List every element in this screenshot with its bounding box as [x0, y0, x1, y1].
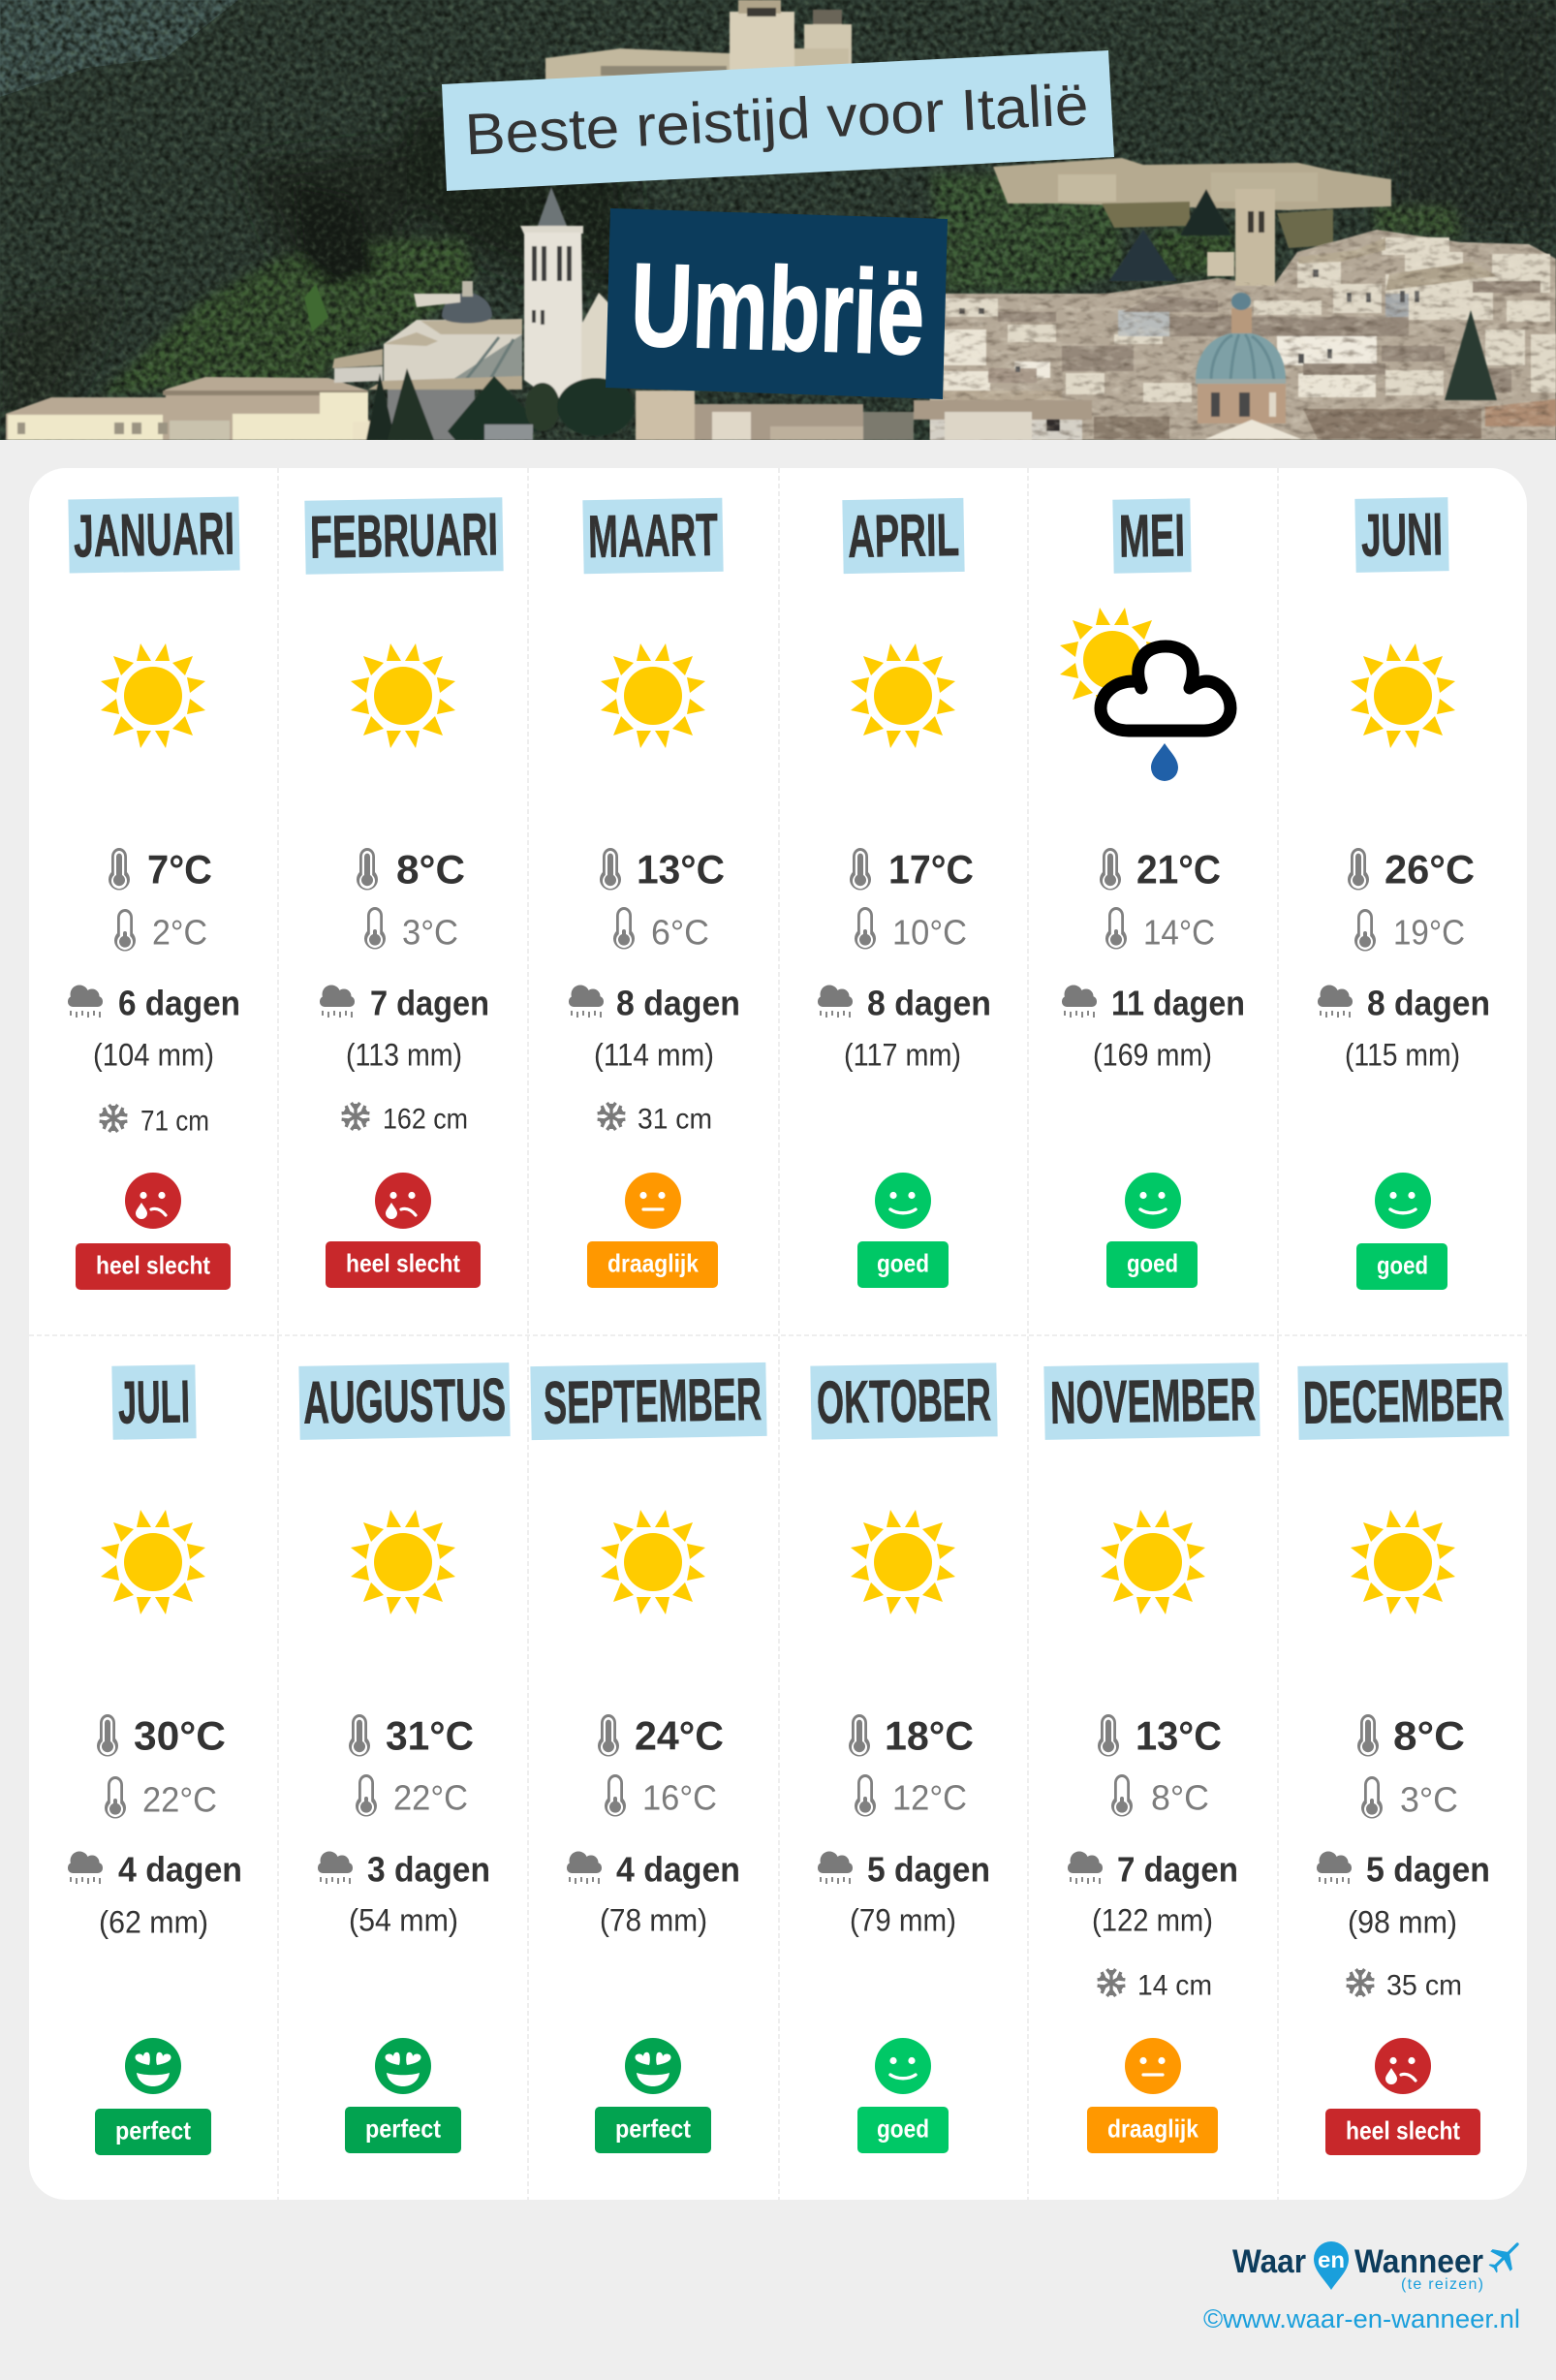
- icon: rating face: [1375, 1173, 1431, 1229]
- heading: november: [1043, 1362, 1260, 1440]
- icon: rain cloud: [569, 985, 604, 1018]
- rating label: heel slecht: [1346, 2116, 1460, 2145]
- heading: juni: [1354, 497, 1449, 573]
- rating label: [857, 1241, 949, 1288]
- rating label: goed: [1377, 1250, 1428, 1279]
- max temperature: 13°C: [1136, 1713, 1222, 1758]
- heading: januari: [68, 496, 240, 574]
- rainfall: (117 mm): [844, 1037, 961, 1072]
- icon: thermometer low: [855, 1774, 876, 1817]
- rating label: [595, 2107, 711, 2153]
- icon: sun: [101, 1510, 205, 1614]
- icon: snowflake: [100, 1105, 127, 1132]
- min temperature: 3°C: [402, 913, 458, 952]
- min temperature: 8°C: [1151, 1777, 1209, 1818]
- icon: rain cloud: [818, 985, 853, 1018]
- icon: thermometer high: [849, 1714, 870, 1757]
- rating label: heel slecht: [346, 1248, 460, 1277]
- icon: rain cloud: [68, 985, 103, 1018]
- rating label: [1356, 1243, 1447, 1290]
- snowfall: 31 cm: [638, 1103, 712, 1136]
- rainfall: (104 mm): [93, 1037, 214, 1072]
- icon: thermometer high: [97, 1714, 118, 1757]
- icon: thermometer high: [600, 848, 621, 891]
- icon: sun: [1101, 1510, 1205, 1614]
- icon: rain cloud: [1068, 1851, 1103, 1884]
- icon: rating face: [125, 1173, 181, 1229]
- icon: thermometer low: [356, 1774, 377, 1817]
- rating label: [345, 2107, 461, 2153]
- icon: rain cloud: [1318, 985, 1353, 1018]
- logo: Waar en Wanneer: (te reizen): [1401, 2276, 1483, 2293]
- month: april: [818, 498, 991, 1288]
- icon: rain cloud: [68, 1851, 103, 1884]
- rain days: 8 dagen: [616, 983, 740, 1023]
- rating label: perfect: [615, 2114, 691, 2144]
- rainfall: (62 mm): [99, 1905, 208, 1940]
- icon: thermometer low: [105, 1776, 126, 1819]
- icon: thermometer low: [364, 907, 386, 950]
- max temperature: 24°C: [635, 1713, 724, 1758]
- max temperature: 13°C: [637, 847, 725, 892]
- rating label: [857, 2107, 949, 2153]
- rain days: 7 dagen: [1117, 1849, 1238, 1890]
- source url: ©www.waar-en-wanneer.nl: [1203, 2304, 1520, 2333]
- heading: april: APRIL: [847, 502, 960, 571]
- rating label: goed: [877, 2114, 929, 2144]
- heading: november: NOVEMBER: [1049, 1366, 1257, 1437]
- icon: sun: [851, 1510, 955, 1614]
- snowfall: 35 cm: [1386, 1969, 1462, 2002]
- month: maart: [569, 498, 740, 1288]
- region heading: Umbrië: Umbrië: [629, 238, 926, 380]
- min temperature: 22°C: [393, 1777, 468, 1818]
- rain days: 4 dagen: [118, 1849, 242, 1890]
- rainfall: (115 mm): [1345, 1037, 1460, 1072]
- icon: thermometer high: [357, 848, 378, 891]
- icon: thermometer low: [114, 909, 136, 952]
- city buildings left: [6, 187, 1092, 440]
- rating label: [326, 1241, 481, 1288]
- icon: thermometer high: [1348, 848, 1369, 891]
- rain days: 8 dagen: [1367, 983, 1490, 1023]
- month: december: [1297, 1362, 1509, 2155]
- icon: location pin: en: [1318, 2247, 1345, 2272]
- max temperature: 7°C: [147, 847, 212, 892]
- heading: januari: JANUARI: [73, 501, 235, 570]
- heading: mei: [1112, 498, 1192, 574]
- icon: rating face: [875, 1173, 931, 1229]
- rain days: 8 dagen: [867, 983, 991, 1023]
- icon: rain cloud: [1062, 985, 1097, 1018]
- heading: september: SEPTEMBER: [543, 1366, 762, 1437]
- icon: rating face: [625, 1173, 681, 1229]
- rainfall: (79 mm): [850, 1903, 956, 1938]
- rating label: [95, 2109, 211, 2155]
- icon: thermometer low: [1111, 1774, 1133, 1817]
- max temperature: 8°C: [396, 847, 465, 892]
- heading: maart: MAART: [587, 502, 719, 571]
- max temperature: 21°C: [1136, 847, 1221, 892]
- rainfall: (54 mm): [349, 1903, 458, 1938]
- snowfall: 71 cm: [140, 1105, 209, 1138]
- title banner: Beste reistijd voor Italië: [463, 72, 1090, 167]
- month: februari: [304, 497, 504, 1288]
- rainfall: (98 mm): [1348, 1905, 1457, 1940]
- min temperature: 19°C: [1393, 913, 1465, 952]
- icon: rain cloud: [567, 1851, 602, 1884]
- heading: mei: MEI: [1118, 502, 1186, 571]
- icon: thermometer low: [1105, 907, 1127, 950]
- rating label: heel slecht: [96, 1250, 210, 1279]
- fortress wall: [993, 158, 1391, 248]
- icon: sun: [601, 1510, 705, 1614]
- icon: thermometer high: [598, 1714, 619, 1757]
- icon: thermometer high: [109, 848, 130, 891]
- icon: thermometer low: [613, 907, 635, 950]
- max temperature: 26°C: [1385, 847, 1475, 892]
- month: september: [530, 1362, 767, 2153]
- heading: augustus: AUGUSTUS: [302, 1366, 507, 1437]
- rating label: draaglijk: [1107, 2114, 1198, 2144]
- month: augustus: [298, 1362, 511, 2153]
- rain days: 4 dagen: [616, 1849, 740, 1890]
- min temperature: 14°C: [1143, 913, 1215, 952]
- bell tower: [520, 187, 620, 400]
- header photo: hill town: [0, 0, 1556, 440]
- heading: oktober: [810, 1362, 998, 1440]
- title banner: [442, 50, 1114, 191]
- icon: rating face: [375, 2038, 431, 2094]
- icon: sun: [1351, 1510, 1455, 1614]
- month: januari: [68, 496, 240, 1290]
- icon: thermometer low: [1354, 909, 1376, 952]
- max temperature: 17°C: [888, 847, 974, 892]
- month: juni: [1318, 497, 1490, 1290]
- rating label: goed: [877, 1248, 929, 1277]
- hilltop castle: [545, 0, 852, 97]
- max temperature: 8°C: [1393, 1713, 1465, 1758]
- month: juli: [68, 1364, 242, 2155]
- rating label: [76, 1243, 231, 1290]
- min temperature: 22°C: [142, 1779, 217, 1820]
- icon: thermometer low: [1361, 1776, 1383, 1819]
- icon: rating face: [875, 2038, 931, 2094]
- cathedral: [332, 281, 522, 440]
- heading: februari: FEBRUARI: [309, 501, 499, 572]
- icon: airplane: [1482, 2234, 1528, 2279]
- min temperature: 2°C: [152, 913, 207, 952]
- rating label: perfect: [115, 2116, 191, 2145]
- rainfall: (169 mm): [1093, 1037, 1212, 1072]
- rainfall: (78 mm): [600, 1903, 707, 1938]
- icon: rating face: [375, 1173, 431, 1229]
- rain days: 5 dagen: [867, 1849, 990, 1890]
- icon: rain cloud: [818, 1851, 853, 1884]
- panel: climate calendar card: [29, 468, 1527, 2200]
- icon: rain cloud: [320, 985, 355, 1018]
- icon: sun: [1351, 643, 1455, 748]
- heading: oktober: OKTOBER: [816, 1366, 992, 1437]
- rainfall: (113 mm): [346, 1037, 462, 1072]
- rating label: perfect: [365, 2114, 441, 2144]
- icon: sun with rain cloud: [1060, 608, 1230, 781]
- logo: Waar en Wanneer: Wanneer: [1354, 2243, 1483, 2280]
- rain days: 5 dagen: [1366, 1849, 1490, 1890]
- month: november: [1043, 1362, 1260, 2153]
- month: mei: [1060, 498, 1245, 1288]
- icon: thermometer high: [349, 1714, 370, 1757]
- max temperature: 31°C: [386, 1713, 474, 1758]
- min temperature: 3°C: [1400, 1779, 1458, 1820]
- logo: Waar en Wanneer: Waar: [1232, 2243, 1306, 2280]
- icon: thermometer high: [1098, 1714, 1119, 1757]
- icon: sun: [601, 643, 705, 748]
- icon: sun: [351, 643, 455, 748]
- rating label: [1087, 2107, 1218, 2153]
- heading: februari: [304, 497, 504, 575]
- max temperature: 30°C: [134, 1713, 226, 1758]
- rain days: 3 dagen: [367, 1849, 490, 1890]
- icon: snowflake: [1347, 1969, 1374, 1996]
- icon: thermometer low: [605, 1774, 626, 1817]
- logo: Waar en Wanneer: [1232, 2234, 1528, 2293]
- snowfall: 14 cm: [1137, 1969, 1212, 2002]
- month: oktober: [810, 1362, 998, 2153]
- icon: thermometer high: [850, 848, 871, 891]
- icon: snowflake: [1098, 1969, 1125, 1996]
- heading: augustus: [298, 1362, 511, 1440]
- rainfall: (114 mm): [594, 1037, 714, 1072]
- heading: juni: JUNI: [1360, 501, 1444, 570]
- rating label: draaglijk: [607, 1248, 699, 1277]
- icon: rain cloud: [318, 1851, 353, 1884]
- icon: location pin: [1314, 2241, 1349, 2290]
- rain days: 7 dagen: [370, 983, 489, 1023]
- rating label: [587, 1241, 718, 1288]
- icon: thermometer high: [1357, 1714, 1379, 1757]
- heading: juli: JULI: [117, 1368, 191, 1437]
- icon: rating face: [1375, 2038, 1431, 2094]
- icon: thermometer low: [855, 907, 876, 950]
- icon: rating face: [125, 2038, 181, 2094]
- min temperature: 6°C: [651, 913, 709, 952]
- heading: juli: [111, 1364, 197, 1440]
- snowfall: 162 cm: [383, 1103, 468, 1136]
- icon: sun: [351, 1510, 455, 1614]
- heading: maart: [582, 498, 724, 574]
- icon: snowflake: [342, 1103, 369, 1130]
- icon: snowflake: [598, 1103, 625, 1130]
- dome: [1196, 293, 1301, 439]
- icon: rating face: [1125, 2038, 1181, 2094]
- rain days: 11 dagen: [1111, 983, 1245, 1023]
- icon: sun: [851, 643, 955, 748]
- icon: sun: [101, 643, 205, 748]
- rating label: [1106, 1241, 1198, 1288]
- max temperature: 18°C: [885, 1713, 974, 1758]
- icon: thermometer high: [1100, 848, 1121, 891]
- region heading: Umbrië: [606, 208, 948, 399]
- rain days: 6 dagen: [118, 983, 240, 1023]
- heading: september: [530, 1362, 767, 1440]
- min temperature: 16°C: [642, 1777, 717, 1818]
- icon: rain cloud: [1317, 1851, 1352, 1884]
- min temperature: 12°C: [892, 1777, 967, 1818]
- city buildings right: [930, 237, 1556, 440]
- rating label: [1325, 2109, 1480, 2155]
- icon: rating face: [625, 2038, 681, 2094]
- rainfall: (122 mm): [1092, 1903, 1213, 1938]
- icon: rating face: [1125, 1173, 1181, 1229]
- min temperature: 10°C: [892, 913, 967, 952]
- heading: april: [842, 498, 965, 574]
- rating label: goed: [1127, 1248, 1178, 1277]
